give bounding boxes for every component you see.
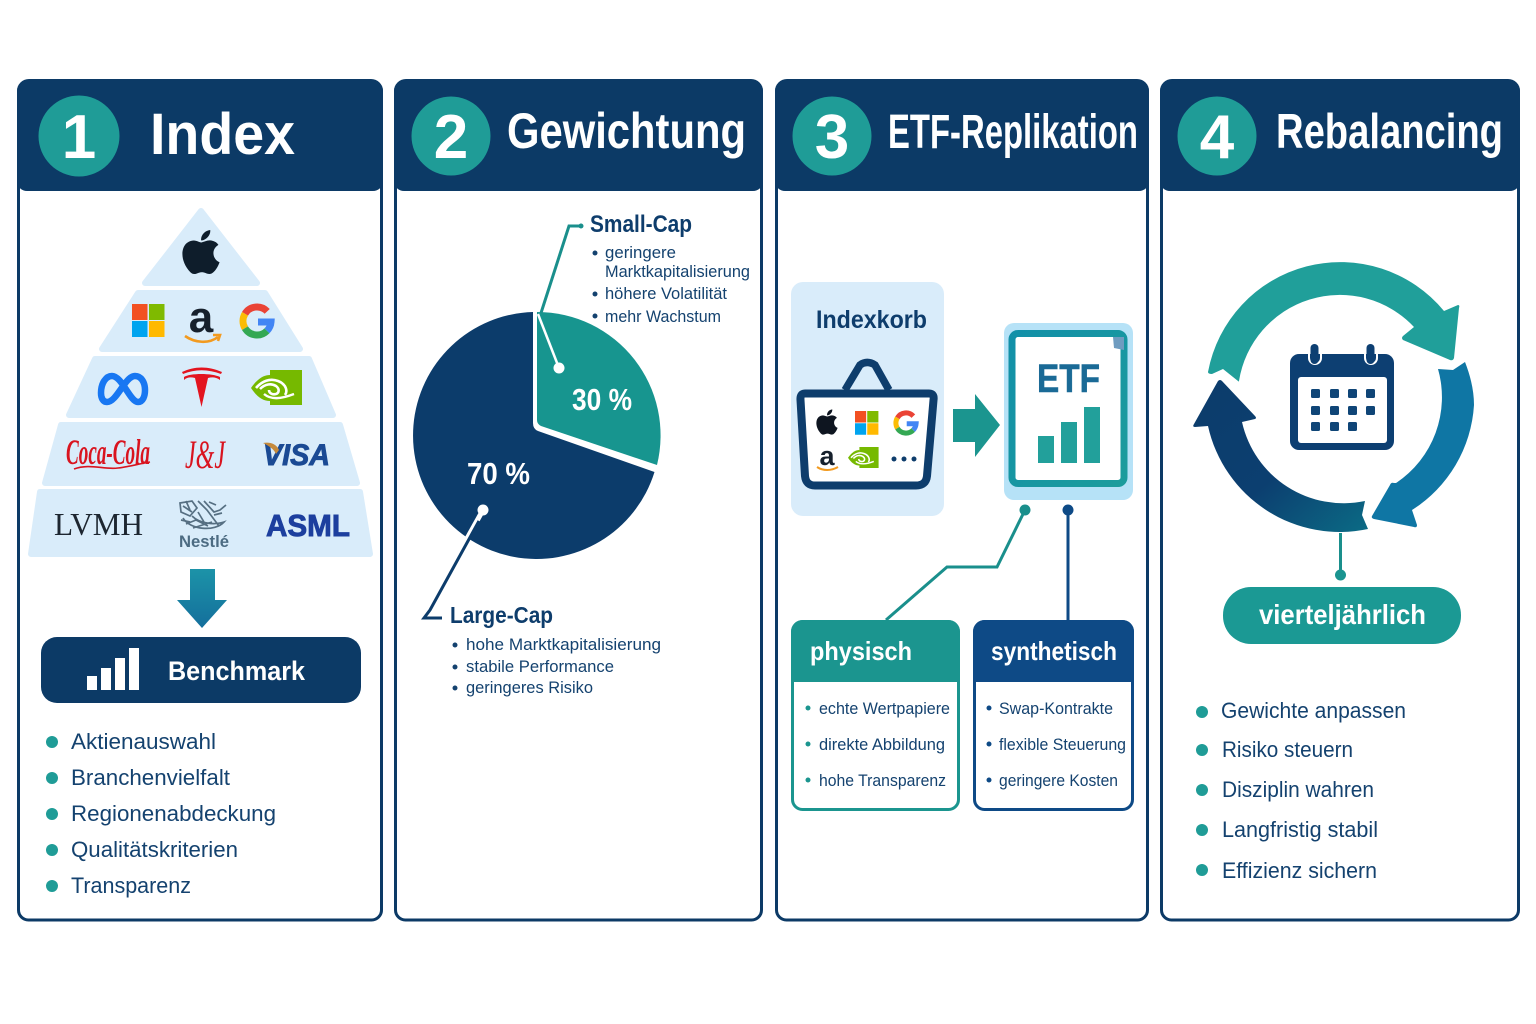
logo: Coca-Cola (66, 432, 150, 472)
logo: Tesla (182, 368, 222, 407)
connector: cycle to pill (1335, 533, 1346, 580)
header: Index (17, 79, 383, 191)
text: Small-Cap: Small-Cap (590, 211, 692, 238)
card: ETF (1004, 323, 1133, 500)
icon: bars (87, 648, 139, 690)
box: physisch: hohe Transparenz (819, 771, 946, 790)
text: Large-Cap: geringeres Risiko (466, 678, 593, 697)
value: 30 %: 30 % (572, 382, 632, 417)
slice: Large-Cap 70 % (413, 312, 654, 559)
header: Gewichtung (394, 79, 763, 191)
logo: Meta (101, 376, 145, 402)
logo: Visa: VISA (263, 439, 330, 472)
card: Indexkorb: Indexkorb (816, 306, 927, 334)
connector: physisch (886, 504, 1030, 620)
value: 70 %: 70 % (467, 456, 530, 491)
connector: synthetisch (1062, 504, 1074, 620)
benchmark pill (41, 637, 361, 703)
logo: Nvidia (251, 370, 302, 405)
text: Large-Cap: Large-Cap (450, 602, 553, 628)
arrow: down to benchmark (177, 569, 227, 628)
list: index criteria (46, 729, 276, 898)
panel: Index (17, 79, 383, 920)
logo: LVMH: LVMH (54, 506, 143, 542)
panel: Gewichtung (394, 79, 763, 920)
card: Indexkorb (791, 282, 944, 516)
list: index criteria: Aktienauswahl (71, 729, 216, 754)
box: synthetisch (973, 620, 1134, 810)
logo: Nestle: Nestlé (179, 532, 229, 551)
icon: calendar (1290, 344, 1394, 450)
card: ETF: ETF (1037, 357, 1100, 401)
text: Small-Cap: geringere (605, 243, 676, 262)
arrow: navy (1193, 380, 1368, 532)
list: rebalancing goals: Disziplin wahren (1222, 777, 1374, 802)
logo: Nestle (179, 501, 229, 551)
text: Small-Cap (590, 211, 750, 326)
list: index criteria: Transparenz (71, 873, 191, 898)
box: physisch: direkte Abbildung (819, 735, 945, 754)
list: rebalancing goals: Effizienz sichern (1222, 858, 1377, 883)
arrow: basket to ETF (953, 394, 1000, 457)
header: Rebalancing (1160, 79, 1520, 191)
panel: Rebalancing (1160, 79, 1520, 920)
header: ETF-Replikation (775, 79, 1149, 191)
logo: Google (243, 307, 271, 335)
header: Gewichtung: Gewichtung (507, 103, 746, 159)
text: Large-Cap: hohe Marktkapitalisierung (466, 635, 661, 654)
list: index criteria: Branchenvielfalt (71, 765, 230, 790)
header: ETF-Replikation: ETF-Replikation (888, 106, 1138, 159)
box: physisch: physisch (810, 636, 912, 666)
icon: basket (800, 362, 934, 486)
logo: Amazon (185, 293, 220, 342)
text: Small-Cap: höhere Volatilität (605, 284, 727, 303)
pie chart (413, 312, 661, 559)
panel: ETF-Replikation (775, 79, 1149, 920)
list: index criteria: Qualitätskriterien (71, 837, 238, 862)
header: ETF-Replikation: 3 (815, 103, 849, 172)
list: rebalancing goals: Gewichte anpassen (1221, 698, 1406, 723)
box: synthetisch: synthetisch (991, 636, 1117, 666)
list: rebalancing goals (1196, 698, 1406, 883)
text: Large-Cap (450, 602, 661, 697)
text: Small-Cap: Marktkapitalisierung (605, 262, 750, 281)
leader line: Small-Cap (538, 224, 584, 374)
logo: Microsoft (132, 304, 164, 337)
header: Gewichtung: 2 (434, 103, 468, 172)
logo: Apple (182, 230, 220, 274)
text: Large-Cap: stabile Performance (466, 657, 614, 676)
list: index criteria: Regionenabdeckung (71, 801, 276, 826)
header: Index: Index (150, 102, 295, 167)
logo: Amazon: a (189, 293, 214, 342)
logo: J&J: J&J (185, 432, 226, 477)
box: physisch (791, 620, 960, 810)
icon: basket: a (819, 441, 835, 471)
header: Index: 1 (62, 103, 96, 172)
benchmark pill: Benchmark (168, 656, 306, 686)
list: rebalancing goals: Risiko steuern (1222, 737, 1353, 762)
box: synthetisch: geringere Kosten (999, 771, 1118, 790)
box: physisch: echte Wertpapiere (819, 699, 950, 718)
list: rebalancing goals: Langfristig stabil (1222, 817, 1378, 842)
arrow: blue (1372, 362, 1474, 527)
pyramid of company logos (31, 211, 370, 554)
pill: vierteljährlich: vierteljährlich (1259, 599, 1426, 630)
text: Small-Cap: mehr Wachstum (605, 307, 721, 326)
logo: Coca-Cola: Coca-Cola (66, 432, 150, 472)
arrow: teal (1208, 262, 1459, 382)
cycle arrows (1193, 262, 1474, 532)
box: synthetisch: Swap-Kontrakte (999, 699, 1113, 718)
logo: ASML: ASML (266, 508, 350, 543)
pill: vierteljährlich (1223, 587, 1461, 644)
leader line: Large-Cap (424, 504, 488, 618)
slice: Small-Cap 30 % (537, 312, 661, 465)
header: Rebalancing: 4 (1200, 103, 1235, 172)
box: synthetisch: flexible Steuerung (999, 735, 1126, 754)
